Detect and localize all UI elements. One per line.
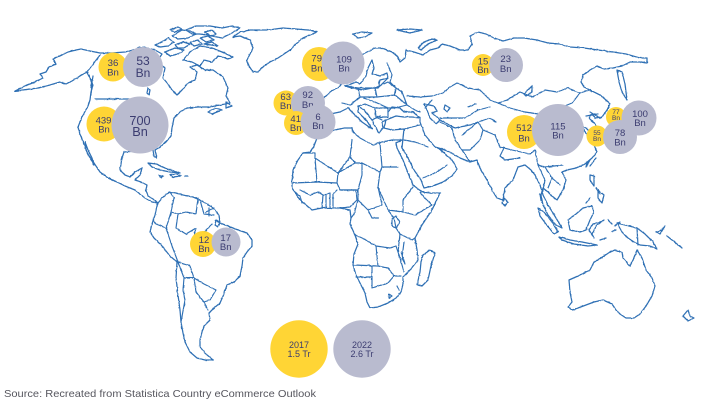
Eurasia [322, 29, 647, 228]
panel: Russia bubbles: 15 [478, 56, 488, 68]
panel: Spain bubbles: Bn [290, 123, 302, 134]
South America borders [153, 192, 216, 322]
Africa [292, 128, 440, 308]
legend: 2017 total: 1.5 Tr [287, 349, 311, 359]
Canadian arctic islands [155, 26, 240, 114]
Australia and New Zealand [568, 250, 694, 321]
legend: 2017 total [270, 320, 328, 378]
world map outline [15, 26, 694, 360]
panel: Russia bubbles: Bn [477, 65, 489, 76]
panel: China bubbles [507, 104, 584, 156]
panel: USA bubbles [86, 96, 168, 154]
panel: France bubbles: 63 [280, 92, 291, 103]
panel: Spain bubbles: 6 [315, 112, 321, 123]
panel: Canada bubbles: Bn [136, 66, 150, 80]
panel: France bubbles: Bn [302, 100, 314, 111]
Eurasia borders [342, 63, 600, 190]
legend: 2017 total: 2017 [289, 340, 309, 350]
panel: South Korea bubbles: 55 [593, 130, 601, 137]
panel: China bubbles: 512 [516, 123, 532, 134]
legend: 2022 total: 2022 [352, 340, 372, 350]
panel: USA bubbles: 700 [129, 114, 151, 128]
panel: UK bubbles: Bn [311, 64, 323, 74]
legend: 2022 total: 2.6 Tr [350, 349, 374, 359]
panel: China bubbles: 115 [550, 122, 566, 132]
panel: Japan bubbles: Bn [634, 118, 646, 129]
panel: France bubbles: 92 [302, 90, 313, 101]
panel: China bubbles: Bn [518, 134, 530, 144]
panel: France bubbles: Bn [280, 101, 292, 112]
panel: Russia bubbles: Bn [500, 64, 512, 75]
panel: Brazil bubbles: Bn [198, 244, 210, 255]
panel: UK bubbles [302, 42, 364, 84]
South America [150, 192, 252, 360]
panel: USA bubbles: Bn [132, 125, 148, 139]
panel: Russia bubbles [472, 48, 523, 82]
panel: South Korea bubbles: Bn [614, 138, 626, 148]
panel: South Korea bubbles [586, 120, 637, 154]
legend: 2022 total [333, 320, 391, 378]
panel: USA bubbles: Bn [98, 124, 110, 136]
panel: Canada bubbles [98, 47, 163, 87]
panel: Brazil bubbles: 17 [220, 233, 231, 244]
panel: Canada bubbles: 53 [136, 54, 150, 68]
Indonesia and Pacific islands [538, 175, 682, 249]
panel: Brazil bubbles [190, 228, 240, 257]
panel: Spain bubbles: 41 [290, 114, 301, 125]
panel: France bubbles [274, 86, 325, 120]
panel: Brazil bubbles: Bn [220, 242, 232, 253]
panel: UK bubbles: Bn [338, 64, 350, 74]
panel: South Korea bubbles: Bn [593, 136, 601, 143]
panel: Japan bubbles: 100 [632, 109, 648, 120]
panel: Japan bubbles: Bn [612, 115, 620, 122]
Greenland [233, 28, 317, 72]
panel: Japan bubbles: 77 [612, 109, 620, 116]
panel: South Korea bubbles: 78 [615, 128, 625, 139]
panel: USA bubbles: 439 [96, 116, 111, 126]
panel: Spain bubbles [284, 104, 336, 140]
panel: Canada bubbles: 36 [108, 58, 118, 69]
panel: China bubbles: Bn [552, 130, 564, 142]
panel: UK bubbles: 109 [336, 54, 352, 66]
North and Central America [15, 47, 230, 203]
panel: Russia bubbles: 23 [500, 54, 511, 65]
panel: Japan bubbles [606, 100, 656, 136]
panel: UK bubbles: 79 [311, 54, 322, 64]
panel: Brazil bubbles: 12 [199, 235, 209, 246]
panel: Spain bubbles: Bn [312, 121, 324, 132]
source note: Source: Recreated from Statistica Country eCommerce Outlook [4, 388, 317, 400]
Africa borders [293, 140, 432, 298]
panel: Canada bubbles: Bn [107, 68, 119, 78]
